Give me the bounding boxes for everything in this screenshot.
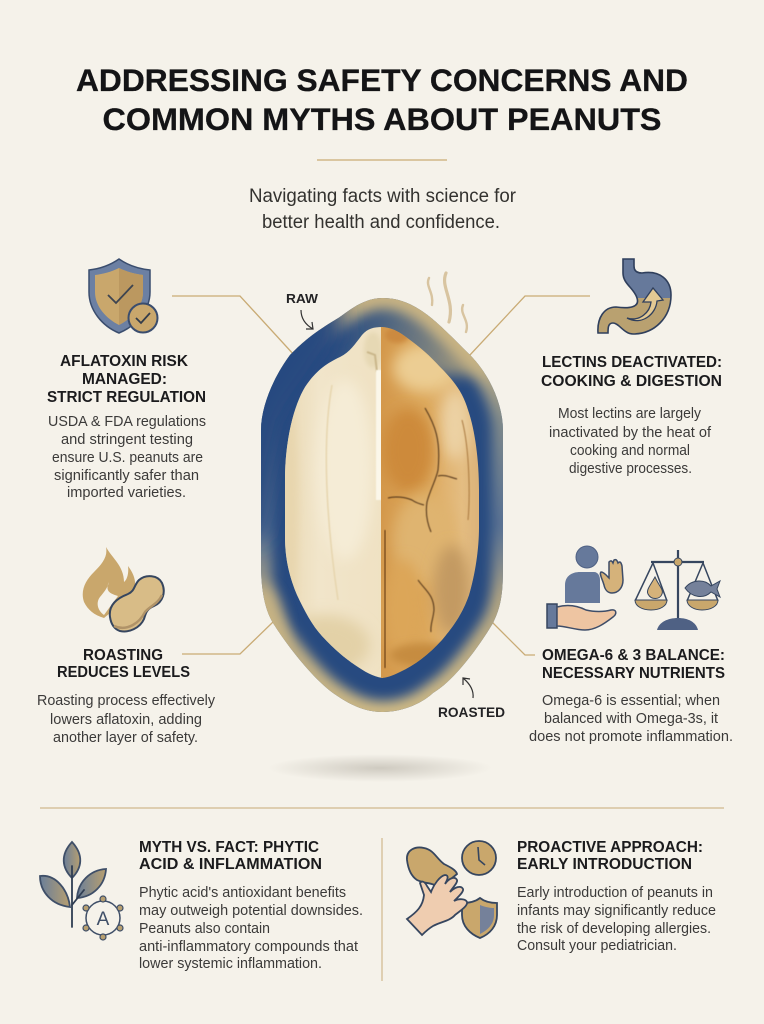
text block: lectins deactivated [541, 354, 722, 477]
label: roasted: ROASTED [438, 704, 505, 720]
text block: roasting reduces levels: REDUCES LEVELS [57, 664, 190, 681]
text block: myth vs fact: Phytic acid's antioxidant benefits [139, 884, 346, 901]
text block: omega balance: NECESSARY NUTRIENTS [542, 665, 725, 682]
text block: roasting reduces levels: Roasting process effectively [37, 692, 215, 709]
arrow: roasted [463, 678, 473, 698]
text block: myth vs fact: anti-inflammatory compounds that [139, 938, 359, 955]
text block: omega balance: OMEGA-6 & 3 BALANCE: [542, 647, 725, 664]
text block: roasting reduces levels [37, 647, 215, 746]
text block: myth vs fact: ACID & INFLAMMATION [139, 856, 322, 873]
text block: lectins deactivated: inactivated by the heat of [549, 424, 712, 441]
text block: myth vs fact: MYTH VS. FACT: PHYTIC [139, 839, 319, 856]
text block: myth vs fact: lower systemic inflammation. [139, 955, 322, 972]
connector lines [172, 296, 590, 655]
subtitle: Navigating facts with science for [249, 186, 517, 207]
text block: aflatoxin risk: MANAGED: [82, 371, 167, 388]
icon: person, hand and balance scale [547, 546, 720, 630]
text block: lectins deactivated: Most lectins are largely [558, 405, 701, 422]
text block: aflatoxin risk: imported varieties. [67, 484, 186, 501]
text block: proactive approach: PROACTIVE APPROACH: [517, 839, 703, 856]
text block: aflatoxin risk: AFLATOXIN RISK [60, 353, 188, 370]
title: COMMON MYTHS ABOUT PEANUTS [102, 101, 661, 137]
subtitle [249, 186, 517, 233]
text block: omega balance [529, 647, 733, 745]
text block: omega balance: balanced with Omega-3s, it [544, 710, 719, 727]
arrow: raw [301, 310, 313, 329]
icon: flame and peanut [83, 547, 164, 631]
text block: myth vs fact [139, 839, 363, 972]
text block: lectins deactivated: cooking and normal [570, 442, 690, 459]
icon: plant and antioxidant molecule [40, 842, 123, 940]
icon: plant and antioxidant molecule: A [97, 909, 110, 930]
text block: roasting reduces levels: another layer of safety. [53, 729, 198, 746]
text block: myth vs fact: Peanuts also contain [139, 920, 270, 937]
icon: stomach [597, 258, 672, 335]
title [76, 62, 688, 137]
text block: proactive approach: EARLY INTRODUCTION [517, 856, 692, 873]
icon: shield with check [89, 259, 158, 333]
peanut halo [261, 298, 503, 712]
peanut: raw half [285, 327, 383, 678]
text block: proactive approach: Early introduction of peanuts in [517, 884, 713, 901]
text block: lectins deactivated: LECTINS DEACTIVATED: [542, 354, 722, 371]
text block: aflatoxin risk: ensure U.S. peanuts are [52, 449, 203, 466]
title: ADDRESSING SAFETY CONCERNS AND [76, 62, 688, 98]
text block: aflatoxin risk: STRICT REGULATION [47, 389, 206, 406]
icon: peanut, clock, shield and hand [407, 841, 497, 938]
subtitle: better health and confidence. [262, 212, 500, 233]
text block: aflatoxin risk: and stringent testing [61, 431, 193, 448]
text block: aflatoxin risk: significantly safer than [54, 467, 199, 484]
text block: proactive approach: infants may significantly reduce [517, 902, 716, 919]
text block: aflatoxin risk [47, 353, 206, 501]
text block: lectins deactivated: digestive processes. [569, 460, 692, 477]
text block: lectins deactivated: COOKING & DIGESTION [541, 373, 722, 390]
text block: roasting reduces levels: lowers aflatoxin, adding [50, 711, 202, 728]
ground shadow [268, 754, 492, 782]
text block: proactive approach [517, 839, 716, 954]
text block: myth vs fact: may outweigh potential downsides. [139, 902, 363, 919]
text block: proactive approach: Consult your pediatrician. [517, 937, 677, 954]
label: raw: RAW [286, 291, 319, 306]
text block: aflatoxin risk: USDA & FDA regulations [48, 413, 206, 430]
icon: steam [428, 273, 467, 332]
text block: omega balance: does not promote inflammation. [529, 728, 733, 745]
text block: roasting reduces levels: ROASTING [83, 647, 163, 664]
peanut: roasted half [381, 327, 479, 678]
text block: omega balance: Omega-6 is essential; when [542, 692, 720, 709]
text block: proactive approach: the risk of developing allergies. [517, 920, 711, 937]
